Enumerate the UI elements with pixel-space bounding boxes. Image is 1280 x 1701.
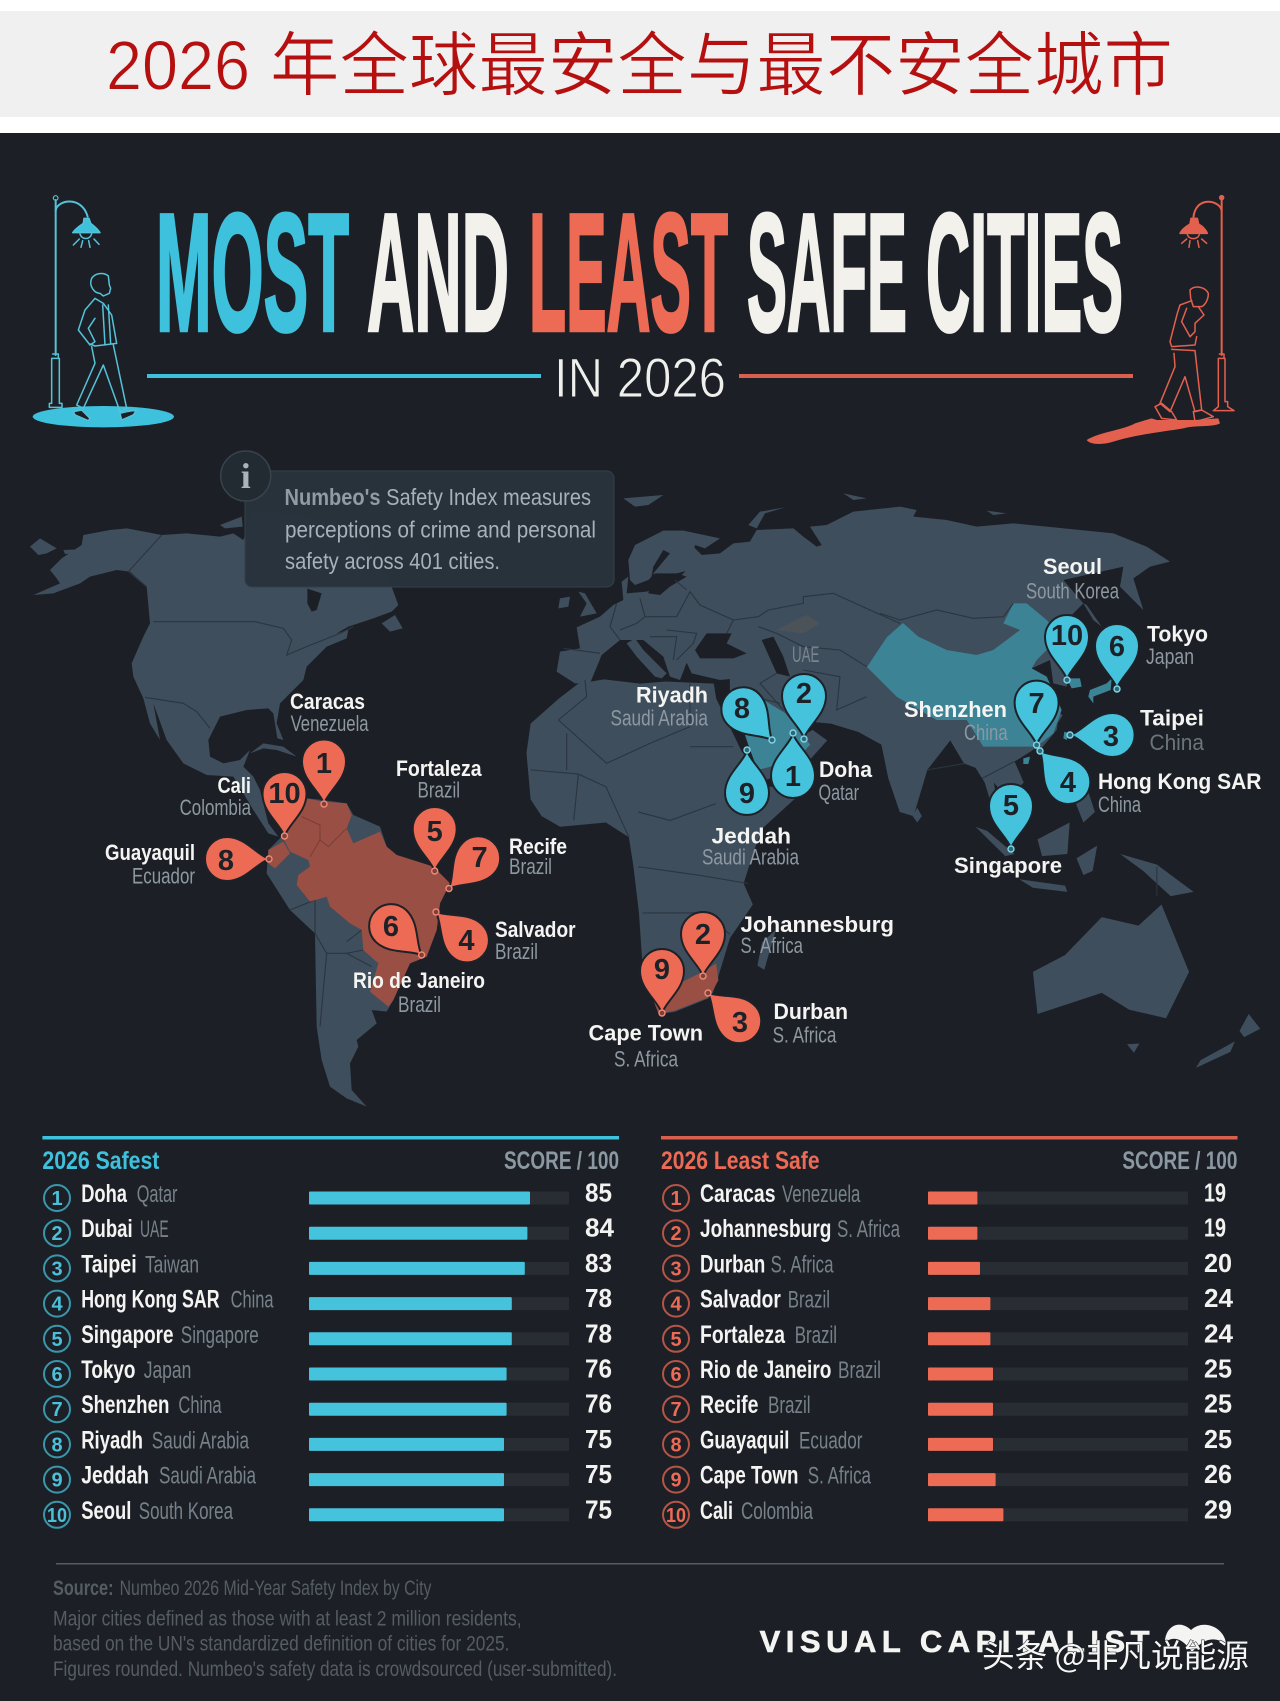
row: Johannesburg 19: 2 [670, 1223, 682, 1245]
map labels: safest cities: Seoul [1043, 554, 1102, 579]
pin 1 Caracas [302, 740, 346, 807]
row: Rio de Janeiro 25: 25 [1204, 1354, 1232, 1384]
map labels: least safe cities: Brazil [495, 939, 538, 964]
row: Singapore 78: 78 [585, 1318, 612, 1348]
map labels: safest cities: China [1098, 792, 1142, 817]
row: Salvador 24: 24 [1204, 1283, 1234, 1313]
row: Riyadh 75: Saudi Arabia [152, 1427, 249, 1454]
map labels: safest cities: Qatar [818, 780, 859, 805]
row: Cape Town 26: Cape Town [700, 1462, 798, 1490]
source notes: based on the UN's standardized definition of cities for 2025. [53, 1633, 509, 1656]
table header: safest: SCORE / 100 [504, 1147, 619, 1175]
pin 8 Riyadh [712, 678, 788, 755]
pin 5 Fortaleza: 5 [427, 816, 443, 848]
map labels: least safe cities: Brazil [509, 854, 552, 879]
row: Hong Kong SAR 78 [44, 1283, 612, 1317]
subtitle with rules: IN 2026 [554, 346, 726, 409]
icon: info circle [221, 451, 271, 501]
info callout: safety across 401 cities. [285, 548, 500, 574]
map labels: least safe cities: Cape Town [588, 1020, 703, 1046]
row: Dubai 84: 84 [585, 1213, 615, 1243]
row: Shenzhen 76: 76 [585, 1389, 612, 1419]
map labels: least safe cities: S. Africa [614, 1047, 679, 1072]
pin 8 Riyadh: 8 [734, 693, 750, 725]
row: Recife 25: Recife [700, 1391, 758, 1419]
row: Hong Kong SAR 78: Hong Kong SAR [81, 1286, 220, 1314]
map labels: safest cities: Riyadh [636, 682, 708, 708]
row: Tokyo 76: Japan [144, 1357, 191, 1384]
row: Cali 29: 29 [1204, 1494, 1232, 1524]
pin 4 Salvador: 4 [458, 925, 475, 957]
land: North America [30, 510, 403, 837]
row: Caracas 19: Venezuela [782, 1181, 861, 1208]
row: Salvador 24: Brazil [788, 1287, 830, 1314]
source notes: Numbeo 2026 Mid-Year Safety Index by City [120, 1577, 432, 1600]
row: Doha 85: Qatar [137, 1181, 178, 1208]
row: Salvador 24 [663, 1283, 1234, 1317]
pin 8 Guayaquil [205, 837, 272, 881]
brand wordmark: VISUAL CAPITALIST [760, 1624, 1150, 1659]
footer divider [56, 1563, 1224, 1564]
row: Shenzhen 76: 7 [51, 1399, 63, 1421]
map labels: least safe cities: Rio de Janeiro [353, 968, 485, 993]
row: Riyadh 75 [44, 1424, 612, 1457]
top title band: 年全球最安全与最不安全城市 [270, 26, 1173, 104]
pin 10 Cali [262, 772, 306, 839]
map labels: safest cities: Tokyo [1147, 622, 1208, 646]
pin 3 Taipei [1067, 713, 1135, 757]
pin 2 Dubai [782, 674, 826, 742]
map labels: least safe cities: S. Africa [740, 933, 804, 958]
row: Riyadh 75: 8 [51, 1434, 63, 1456]
row: Recife 25: Brazil [768, 1392, 811, 1419]
table: 2026 safest [42, 1136, 619, 1528]
row: Seoul 75 [44, 1494, 612, 1528]
pin 6 Tokyo: 6 [1109, 631, 1125, 663]
pin 9 Jeddah [725, 747, 769, 815]
headline: MOST [156, 178, 349, 366]
row: Dubai 84: 2 [51, 1223, 63, 1245]
world map [30, 493, 1260, 1107]
map labels: least safe cities: Recife [509, 834, 567, 859]
pin 1 Doha: 1 [785, 761, 801, 793]
map labels: safest cities: Saudi Arabia [610, 706, 709, 731]
row: Singapore 78 [44, 1318, 612, 1352]
row: Taipei 83: Taiwan [145, 1251, 199, 1278]
row: Johannesburg 19: 19 [1204, 1213, 1226, 1243]
row: Rio de Janeiro 25: 6 [670, 1364, 682, 1386]
row: Rio de Janeiro 25: Rio de Janeiro [700, 1356, 831, 1384]
map labels: safest cities: Singapore [954, 853, 1062, 878]
info callout [221, 451, 614, 587]
row: Cali 29: Colombia [741, 1498, 813, 1525]
row: Durban 20: 20 [1204, 1248, 1232, 1278]
row: Singapore 78: 5 [51, 1329, 63, 1351]
row: Recife 25: 25 [1204, 1389, 1232, 1419]
row: Dubai 84: Dubai [81, 1215, 133, 1243]
row: Guayaquil 25: Guayaquil [700, 1426, 789, 1454]
pin 5 Singapore [989, 784, 1033, 852]
row: Doha 85: 85 [585, 1178, 612, 1208]
row: Fortaleza 24: Brazil [795, 1322, 837, 1349]
row: Taipei 83: Taipei [81, 1250, 137, 1278]
top title band: 2026 [106, 26, 250, 104]
pin 6 Tokyo [1095, 624, 1139, 692]
row: Recife 25: 7 [670, 1399, 682, 1421]
map labels: least safe cities: Ecuador [132, 864, 195, 888]
row: Johannesburg 19: Johannesburg [700, 1215, 831, 1243]
pin 8 Guayaquil: 8 [218, 845, 234, 877]
pin 7 Recife: 7 [472, 842, 488, 874]
row: Taipei 83: 83 [585, 1248, 612, 1278]
source notes [53, 1577, 617, 1681]
row: Caracas 19: 19 [1204, 1178, 1226, 1208]
row: Riyadh 75: Riyadh [81, 1426, 143, 1454]
source notes: Figures rounded. Numbeo's safety data is crowdsourced (user-submitted). [53, 1658, 617, 1681]
pin 5 Fortaleza [413, 807, 457, 874]
headline: SAFE [747, 178, 907, 366]
illustration: safe man under street lamp [33, 196, 174, 427]
pin 4 Hong Kong: 4 [1060, 767, 1076, 799]
row: Hong Kong SAR 78: China [231, 1287, 274, 1314]
illustration: unsafe man under street lamp [1087, 196, 1234, 444]
row: Cape Town 26: 26 [1204, 1459, 1232, 1489]
map labels: least safe cities: Brazil [418, 778, 460, 803]
info callout: perceptions of crime and personal [285, 516, 596, 542]
map labels: least safe cities: Johannesburg [740, 912, 894, 937]
row: Fortaleza 24: 24 [1204, 1318, 1234, 1348]
map labels: safest cities: Hong Kong SAR [1098, 769, 1262, 794]
row: Guayaquil 25: 25 [1204, 1424, 1232, 1454]
map labels: safest cities: China [1150, 730, 1205, 755]
row: Singapore 78: Singapore [81, 1321, 174, 1349]
row: Hong Kong SAR 78: 4 [51, 1294, 63, 1316]
pin 10 Seoul: 10 [1051, 620, 1083, 652]
row: Caracas 19: Caracas [700, 1180, 776, 1208]
land: South America [267, 798, 450, 1107]
pin 6 Rio de Janeiro [360, 895, 437, 971]
watermark: 头条 @非凡说能源 [982, 1631, 1249, 1677]
pin 7 Shenzhen: 7 [1029, 688, 1045, 720]
row: Guayaquil 25: Ecuador [799, 1427, 862, 1454]
row: Durban 20 [663, 1248, 1232, 1281]
row: Cape Town 26: S. Africa [808, 1463, 871, 1490]
row: Singapore 78: Singapore [181, 1322, 259, 1349]
pin 9 Cape Town [640, 949, 684, 1016]
map labels: least safe cities: Durban [774, 999, 848, 1024]
row: Jeddah 75: 75 [585, 1459, 612, 1489]
pin 7 Shenzhen [1015, 681, 1059, 748]
row: Jeddah 75: Jeddah [81, 1462, 149, 1490]
row: Tokyo 76: 6 [51, 1364, 63, 1386]
row: Fortaleza 24: Fortaleza [700, 1321, 786, 1349]
row: Rio de Janeiro 25 [663, 1354, 1232, 1387]
map labels: least safe cities: Colombia [180, 795, 252, 820]
row: Doha 85 [44, 1178, 612, 1211]
row: Tokyo 76 [44, 1354, 612, 1387]
land: Europe and northern Asia [557, 493, 1170, 770]
row: Shenzhen 76: Shenzhen [81, 1391, 169, 1419]
map labels: safest cities: Japan [1146, 644, 1194, 669]
table: 2026 least safe [661, 1136, 1238, 1528]
row: Durban 20: Durban [700, 1250, 765, 1278]
row: Doha 85: Doha [81, 1180, 128, 1208]
pin 1 Doha [771, 730, 815, 798]
row: Seoul 75: Seoul [81, 1497, 131, 1525]
row: Taipei 83 [44, 1248, 612, 1281]
pin 2 Johannesburg [681, 912, 725, 979]
map labels: least safe cities: Brazil [398, 992, 441, 1017]
row: Caracas 19 [663, 1178, 1226, 1211]
row: Hong Kong SAR 78: 78 [585, 1283, 612, 1313]
row: Salvador 24: Salvador [700, 1286, 781, 1314]
info callout: Numbeo's Safety Index measures [284, 484, 591, 510]
row: Jeddah 75 [44, 1459, 612, 1493]
pin 4 Salvador [421, 896, 498, 972]
map labels: least safe cities: Salvador [495, 917, 576, 942]
map pins: least safe [205, 740, 770, 1052]
row: Cali 29 [663, 1494, 1232, 1528]
map labels: safest cities: Taipei [1140, 706, 1204, 731]
row: Cape Town 26 [663, 1459, 1232, 1493]
row: Johannesburg 19: S. Africa [837, 1216, 900, 1243]
pin 10 Cali: 10 [268, 778, 301, 810]
map labels: least safe cities: Cali [218, 773, 251, 798]
pin 3 Durban [693, 977, 770, 1052]
map labels: safest cities [610, 554, 1262, 878]
map labels: safest cities: China [964, 720, 1008, 745]
table header: least safe: SCORE / 100 [1122, 1147, 1237, 1175]
row: Tokyo 76: 76 [585, 1354, 612, 1384]
row: Shenzhen 76 [44, 1389, 612, 1422]
map labels: safest cities: UAE [792, 642, 819, 667]
pin 5 Singapore: 5 [1003, 790, 1019, 822]
row: Seoul 75: South Korea [139, 1498, 233, 1525]
row: Salvador 24: 4 [670, 1294, 682, 1316]
row: Doha 85: 1 [51, 1188, 63, 1210]
map labels: safest cities: Doha [819, 757, 873, 782]
headline: AND [367, 178, 509, 366]
top title band [0, 11, 1280, 117]
map labels: safest cities: South Korea [1026, 579, 1120, 604]
row: Shenzhen 76: China [178, 1392, 222, 1419]
pin 2 Johannesburg: 2 [695, 919, 711, 951]
pin 10 Seoul [1045, 615, 1089, 683]
row: Seoul 75: 75 [585, 1494, 612, 1524]
map labels: least safe cities: Guayaquil [105, 840, 195, 865]
row: Durban 20: S. Africa [771, 1251, 834, 1278]
icon: brand logo [1165, 1625, 1226, 1652]
table header: least safe: 2026 Least Safe [661, 1147, 820, 1175]
headline [156, 178, 1123, 366]
row: Durban 20: 3 [670, 1258, 682, 1280]
map pins: safest [712, 615, 1139, 852]
highlighted countries: China and East Asia [867, 603, 1112, 764]
pin 9 Cape Town: 9 [654, 954, 670, 986]
map labels: least safe cities: Caracas [290, 689, 365, 714]
pin 6 Rio de Janeiro: 6 [383, 911, 399, 943]
row: Dubai 84 [44, 1213, 615, 1246]
map labels: least safe cities: Fortaleza [396, 756, 482, 781]
table header: safest: 2026 Safest [42, 1147, 160, 1175]
map labels: safest cities: Jeddah [712, 824, 791, 848]
row: Tokyo 76: Tokyo [81, 1356, 136, 1384]
pin 7 Recife [433, 827, 509, 904]
subtitle with rules [147, 346, 1133, 409]
row: Riyadh 75: 75 [585, 1424, 612, 1454]
source notes: Source: [53, 1577, 114, 1600]
row: Fortaleza 24: 5 [670, 1329, 682, 1351]
row: Recife 25 [663, 1389, 1232, 1422]
row: Jeddah 75: Saudi Arabia [159, 1463, 256, 1490]
row: Rio de Janeiro 25: Brazil [838, 1357, 881, 1384]
row: Seoul 75: 10 [47, 1505, 67, 1527]
row: Caracas 19: 1 [670, 1188, 682, 1210]
row: Taipei 83: 3 [51, 1258, 63, 1280]
row: Cape Town 26: 9 [670, 1470, 682, 1492]
pin 3 Durban: 3 [732, 1007, 748, 1039]
land: Africa, southern Asia and Oceania [526, 652, 1260, 1068]
row: Guayaquil 25: 8 [670, 1434, 682, 1456]
map labels: least safe cities: S. Africa [773, 1023, 837, 1048]
highlighted countries: Saudi Arabia and South Africa [650, 696, 810, 1014]
row: Guayaquil 25 [663, 1424, 1232, 1457]
pin 3 Taipei: 3 [1103, 721, 1119, 753]
icon: info circle: i [241, 456, 251, 496]
source notes: Major cities defined as those with at least 2 million residents, [53, 1608, 522, 1631]
map labels: safest cities: Shenzhen [904, 697, 1007, 722]
pin 4 Hong Kong [1024, 736, 1099, 813]
pin 9 Jeddah: 9 [739, 778, 755, 810]
row: Dubai 84: UAE [140, 1216, 169, 1243]
row: Cali 29: Cali [700, 1497, 733, 1525]
map labels: least safe cities: Venezuela [291, 711, 369, 736]
row: Fortaleza 24 [663, 1318, 1234, 1352]
row: Jeddah 75: 9 [51, 1470, 63, 1492]
row: Johannesburg 19 [663, 1213, 1226, 1246]
highlighted countries in South America [268, 798, 450, 1007]
map labels: least safe cities [105, 689, 894, 1072]
table header: least safe [661, 1136, 1238, 1175]
table header: safest [42, 1136, 619, 1175]
pin 2 Dubai: 2 [796, 678, 812, 710]
headline: LEAST [529, 178, 728, 366]
row: Cali 29: 10 [666, 1505, 686, 1527]
pin 1 Caracas: 1 [316, 748, 332, 780]
map labels: safest cities: Saudi Arabia [702, 845, 800, 870]
